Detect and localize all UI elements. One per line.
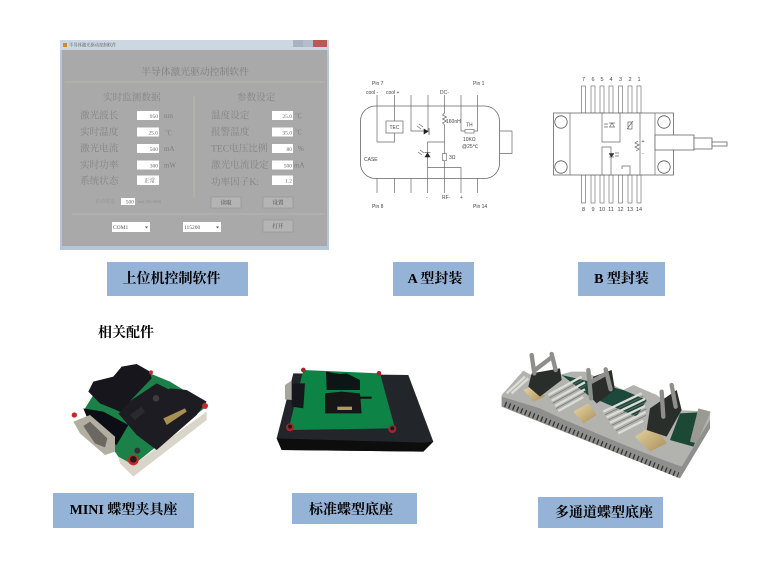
schematic labels: @25℃ <box>462 144 479 150</box>
laser diode <box>424 152 430 157</box>
D-sub housing <box>83 408 128 445</box>
window controls <box>293 40 327 47</box>
auto send row <box>95 198 162 206</box>
caption: standard butterfly base <box>292 493 417 524</box>
schematic labels: RF- <box>442 195 451 201</box>
coil <box>442 113 446 125</box>
monitoring rows: 系统状态 <box>80 175 119 187</box>
schematic labels: 3Ω <box>449 155 456 161</box>
thermistor <box>465 130 474 133</box>
monitoring rows <box>80 110 176 187</box>
D-sub connector <box>73 415 115 455</box>
monitoring rows: 实时功率 <box>80 159 119 171</box>
monitoring rows: 300 <box>150 164 158 170</box>
button: read <box>211 197 241 208</box>
parameter rows <box>211 110 304 188</box>
mounting holes <box>555 116 670 173</box>
schematic labels: Pin 1 <box>473 81 485 87</box>
window icon <box>63 43 67 47</box>
pin numbers: 5 <box>600 77 604 83</box>
parameter rows: 温度设定 <box>211 110 250 122</box>
heat-sink fins <box>507 377 646 433</box>
PCB <box>288 370 395 430</box>
parameter rows: 25.0 <box>282 114 292 120</box>
metal base top <box>277 373 433 452</box>
schematic labels: cool + <box>386 90 400 96</box>
pin numbers: 14 <box>636 207 642 213</box>
photo: standard butterfly base <box>277 368 433 452</box>
package case <box>360 106 500 178</box>
gold stages <box>523 385 667 452</box>
photo: multi-channel butterfly base <box>502 354 711 478</box>
pin numbers: 11 <box>608 207 614 213</box>
button: open: 打开 <box>272 222 284 230</box>
D-sub connector <box>292 383 305 408</box>
caption: control software <box>107 262 248 296</box>
pin numbers: 8 <box>582 207 585 213</box>
auto send row: 自动发送 <box>95 198 115 205</box>
parameter rows: ℃ <box>295 112 302 120</box>
caption: standard butterfly base: 标准蝶型底座 <box>309 501 394 518</box>
caption: type A package: A 型封装 <box>408 270 462 287</box>
dropdown: baud rate <box>183 222 221 232</box>
parameter rows: 功率因子K: <box>211 176 259 188</box>
parameter rows: 激光电流设定 <box>211 159 269 171</box>
caption: multi-channel butterfly base: 多通道蝶型底座 <box>555 504 654 521</box>
green strip <box>562 375 647 417</box>
bottom pins <box>582 175 641 203</box>
resistor <box>442 154 446 160</box>
monitoring rows: 25.0 <box>148 130 158 136</box>
auto send row: 500 <box>126 200 134 206</box>
caption: multi-channel butterfly base <box>538 497 663 528</box>
window title bar text: 半导体激光驱动控制软件 <box>69 42 117 48</box>
pin numbers: 2 <box>628 77 632 83</box>
caption: MINI butterfly fixture: MINI 蝶型夹具座 <box>70 501 178 518</box>
monitoring rows: 激光电流 <box>80 142 119 154</box>
button: open <box>263 220 293 232</box>
screws <box>286 368 396 433</box>
photodiode <box>424 128 429 135</box>
parameter rows: % <box>298 145 304 153</box>
pin numbers <box>582 77 642 213</box>
parameter rows: 500 <box>284 164 292 170</box>
dropdown: port <box>112 222 150 232</box>
auto send row: ms(100-500) <box>138 199 162 204</box>
diagram: type A package schematic <box>360 81 512 210</box>
pin numbers: 13 <box>627 207 633 213</box>
monitoring rows: mW <box>164 162 176 170</box>
pin numbers: 4 <box>609 77 613 83</box>
schematic labels: cool - <box>366 90 379 96</box>
button: read: 读取 <box>220 198 232 206</box>
screws <box>72 370 208 465</box>
dropdown: port: COM1 <box>113 225 129 231</box>
caption: MINI butterfly fixture <box>53 493 194 528</box>
pin numbers: 6 <box>591 77 595 83</box>
clip 1 <box>88 364 152 412</box>
parameter rows: 1.2 <box>285 178 292 184</box>
schematic labels: Pin 14 <box>473 204 487 210</box>
caption: type B package: B 型封装 <box>594 270 649 287</box>
pin numbers: 1 <box>637 77 641 83</box>
TEC block <box>386 121 403 133</box>
internal components: - <box>642 151 644 157</box>
clamps <box>528 368 682 437</box>
parameter rows: mA <box>294 162 304 170</box>
clips <box>326 372 360 390</box>
pin numbers: 7 <box>582 77 585 83</box>
panel: control software window <box>60 40 329 250</box>
schematic labels: CASE <box>364 157 378 163</box>
parameter rows: ℃ <box>295 128 302 136</box>
caption: control software: 上位机控制软件 <box>122 270 220 287</box>
monitoring rows: nm <box>164 112 174 120</box>
monitoring rows: 500 <box>150 147 158 153</box>
TEC block: TEC <box>390 125 400 131</box>
pin numbers: 12 <box>617 207 624 213</box>
schematic labels: 10KΩ <box>463 137 476 143</box>
monitoring rows: 950 <box>150 114 158 120</box>
schematic labels: TH <box>466 122 473 128</box>
pin numbers: 9 <box>591 207 595 213</box>
monitoring rows: 实时温度 <box>80 126 119 138</box>
button: set <box>263 197 293 208</box>
button: set: 设置 <box>272 198 284 206</box>
right PCB <box>670 412 710 447</box>
monitoring rows: 正常 <box>144 176 155 184</box>
schematic labels: Pin 8 <box>372 204 384 210</box>
schematic labels: 160nH <box>446 119 461 125</box>
parameter rows: 80 <box>286 147 292 153</box>
schematic labels <box>364 81 487 210</box>
software title: 半导体激光驱动控制软件 <box>141 65 249 78</box>
green PCB <box>85 373 208 465</box>
pin numbers: 10 <box>599 207 605 213</box>
heat-sink body <box>502 371 710 478</box>
clip 2 <box>118 388 207 450</box>
internal components <box>604 121 645 157</box>
dropdown: baud rate: 115200 <box>184 225 201 231</box>
monitoring rows: 激光波长 <box>80 110 119 122</box>
caption: type B package <box>578 262 665 296</box>
monitoring rows: mA <box>164 145 174 153</box>
schematic labels: Pin 7 <box>372 81 384 87</box>
heading: monitoring data: 实时监测数据 <box>103 92 161 104</box>
translucent base plate <box>118 412 207 477</box>
monitoring rows: ℃ <box>165 129 172 137</box>
schematic labels: - <box>426 195 428 201</box>
fiber pigtail <box>655 135 727 150</box>
package body <box>554 113 674 175</box>
pin numbers: 3 <box>619 77 622 83</box>
front face <box>502 397 710 478</box>
schematic labels: DC- <box>440 90 449 96</box>
parameter rows: 报警温度 <box>211 126 250 138</box>
caption: type A package <box>393 262 474 296</box>
diagram: type B package outline <box>554 77 727 213</box>
internal components: + <box>641 139 645 145</box>
parameter rows: 35.0 <box>282 130 292 136</box>
top pins <box>582 86 641 113</box>
parameter rows: TEC电压比例 <box>211 142 268 154</box>
heading: parameter settings: 参数设定 <box>237 92 276 104</box>
heading: related accessories: 相关配件 <box>98 324 154 341</box>
schematic labels: + <box>460 195 463 201</box>
photo: MINI butterfly fixture <box>72 364 208 477</box>
